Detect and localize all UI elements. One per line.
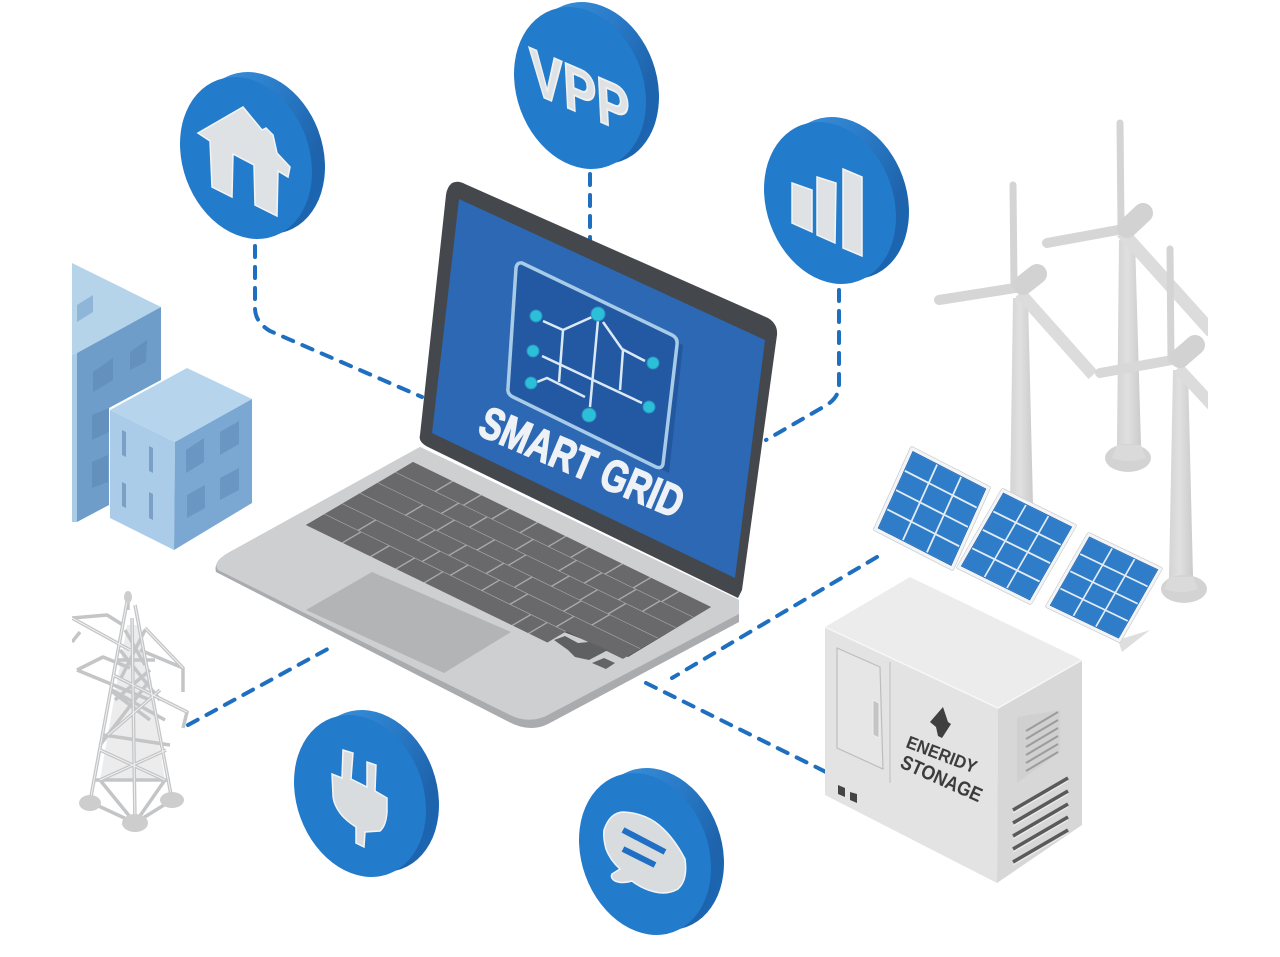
turbine 2 [1047,123,1212,472]
cabinet label: ENERIDY [904,732,980,777]
laptop [216,182,777,728]
icon: VPP badge [492,0,681,188]
icon: chat badge [557,749,746,954]
icon: home badge [158,53,347,258]
laptop base [216,447,739,728]
icon: VPP badge: VPP [528,34,632,149]
turbine 3 [1100,249,1212,603]
energy storage cabinet [825,577,1082,883]
screen grid card [508,263,677,468]
solar panels [873,446,1163,652]
connector: dashed lines [188,174,877,772]
arrow keys [554,636,608,660]
icon: bolt [930,707,951,738]
buildings [72,263,252,550]
tall building [72,263,161,522]
small building [110,368,252,550]
wind turbines [939,123,1212,603]
icon: plug badge [272,691,461,896]
icon: bar chart badge [742,98,931,303]
keyboard [306,462,711,670]
cabinet door [837,648,883,769]
energy storage cabinet: STONAGE [897,751,985,807]
pylon [72,591,187,832]
touchpad [306,572,511,673]
turbine 1 [939,185,1093,505]
screen title: SMART GRID [472,396,692,528]
laptop screen [420,182,777,598]
cabinet vents [1017,710,1060,783]
